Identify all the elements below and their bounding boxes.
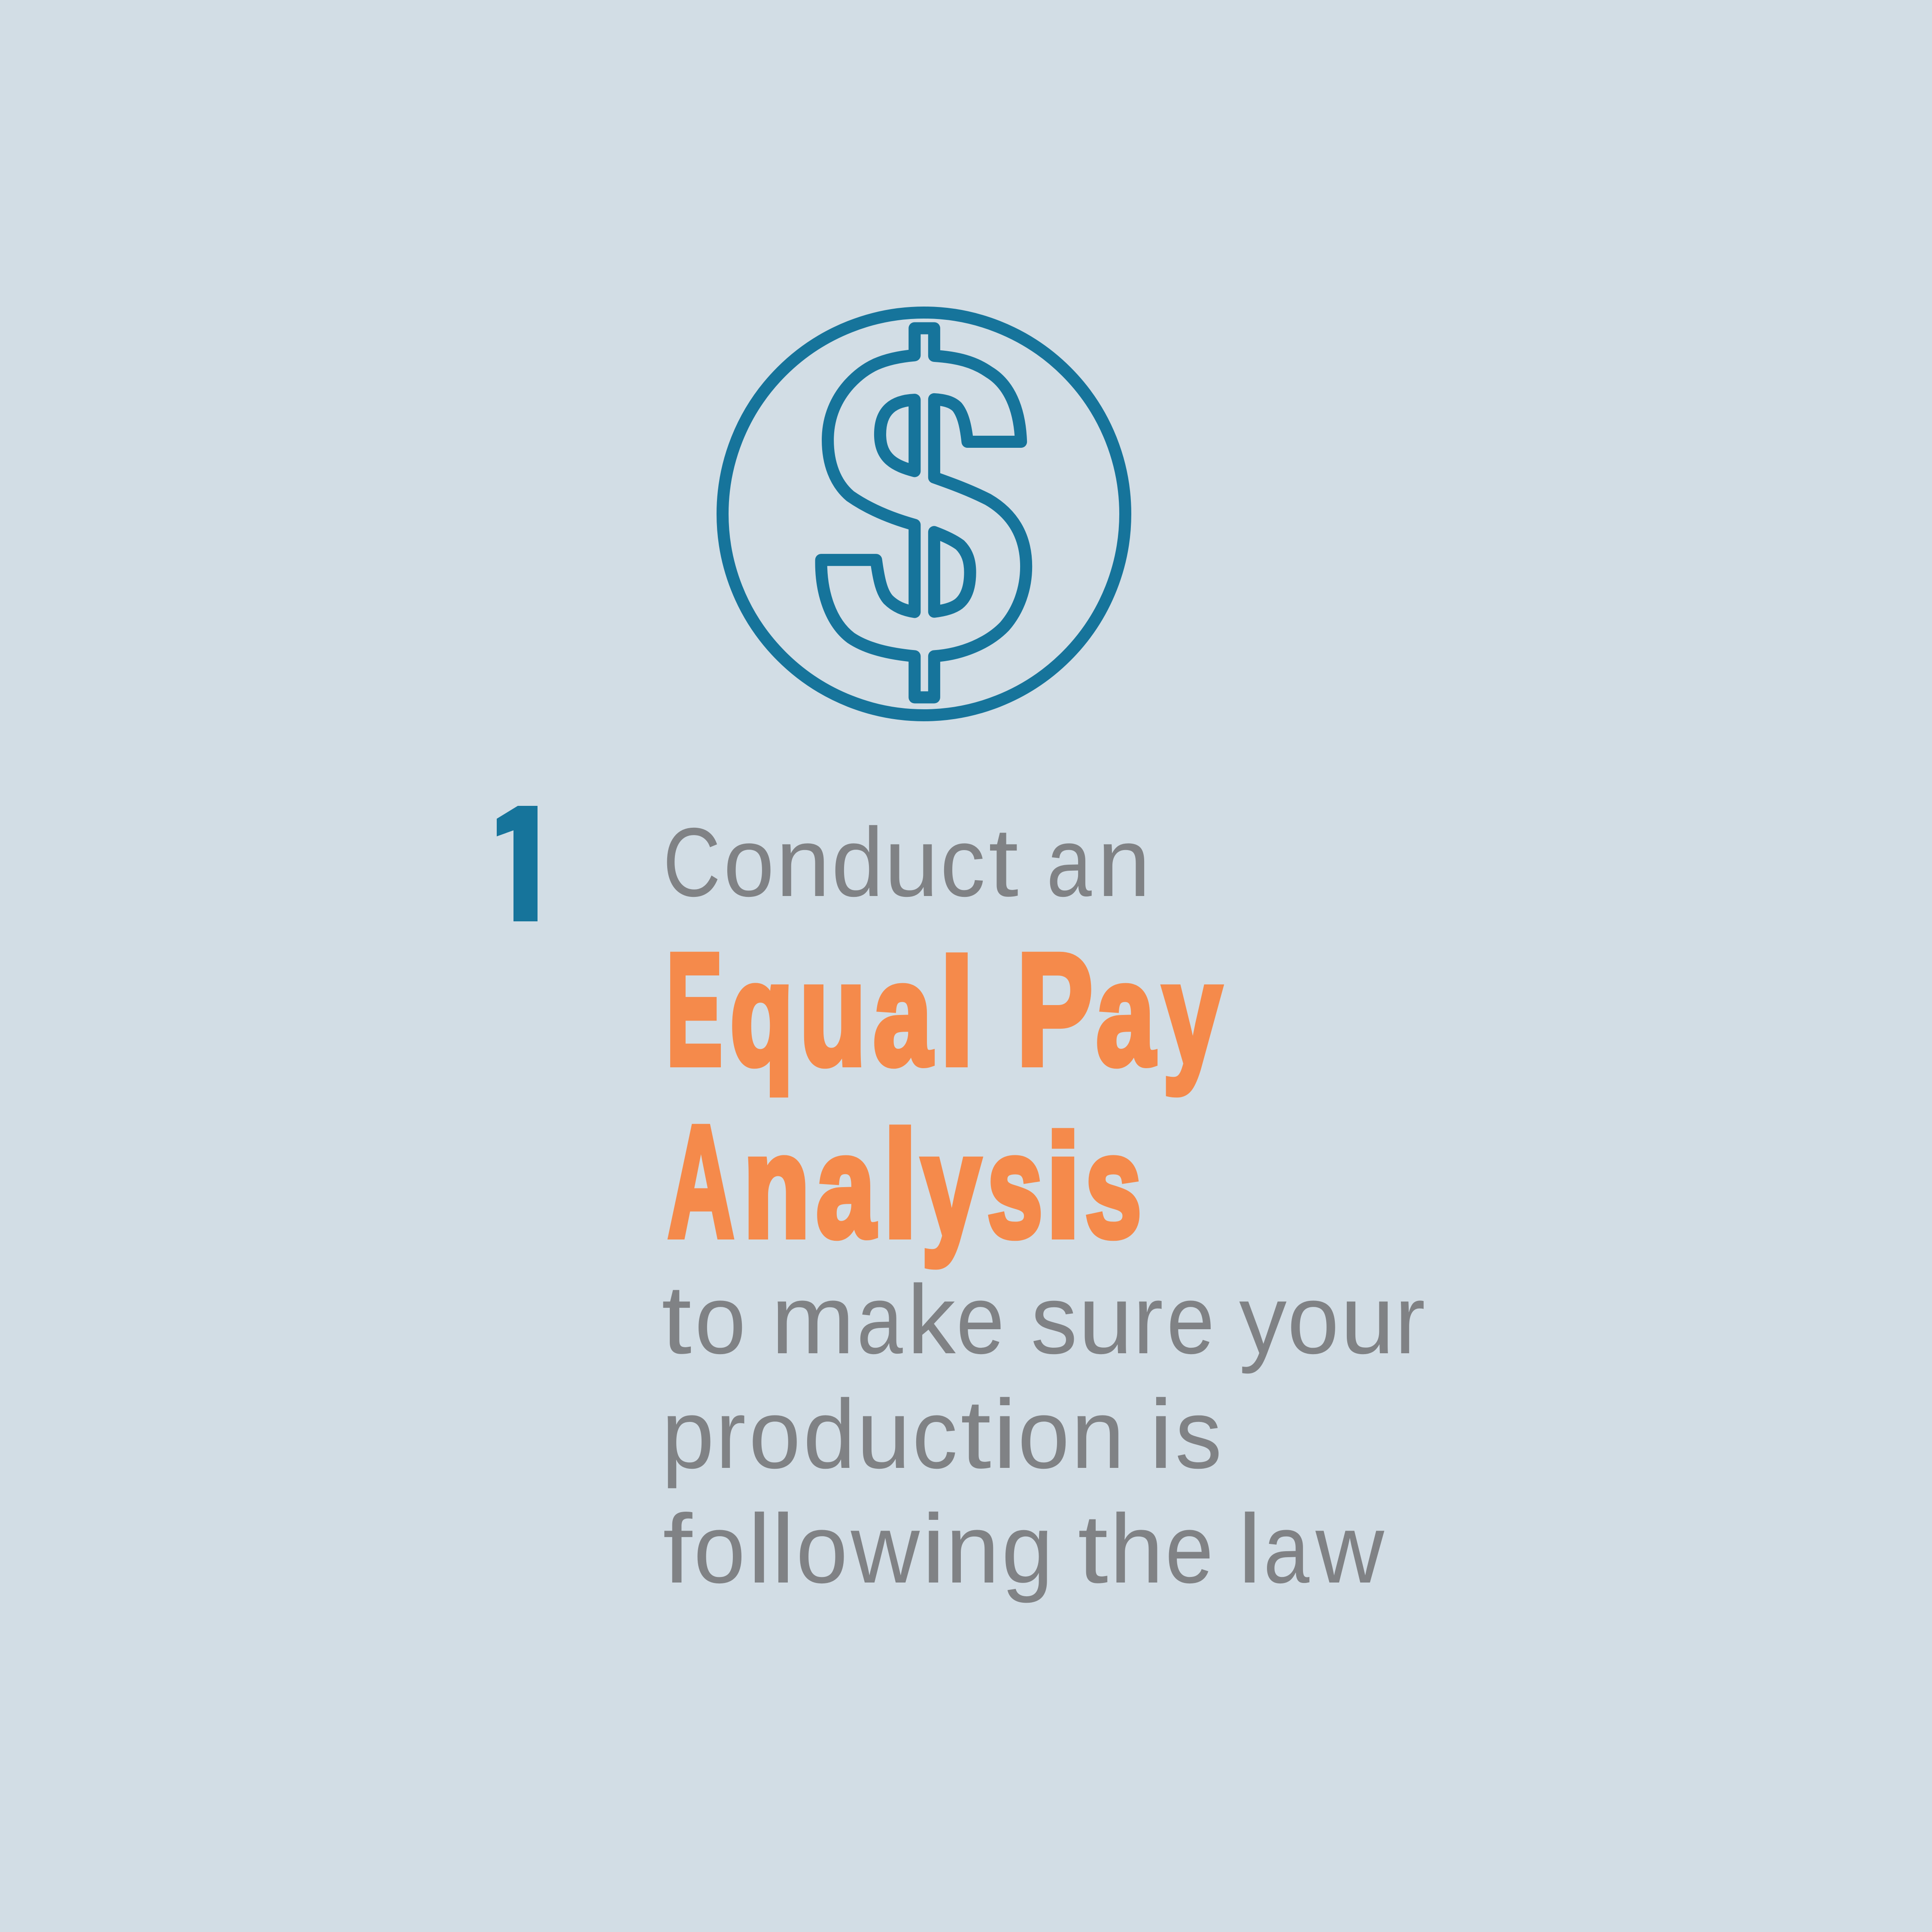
text: body line 2: p — [662, 1380, 714, 1489]
text: intro line: n — [776, 808, 830, 917]
text: body line 1: k — [907, 1265, 956, 1374]
text: body line 1: y — [1239, 1265, 1287, 1374]
text: body line 3: e — [1165, 1495, 1213, 1604]
heading line 1: a — [873, 933, 933, 1095]
text: body line 2: d — [803, 1380, 856, 1489]
text: intro line: u — [884, 808, 939, 917]
heading line 1: l — [940, 929, 974, 1097]
text: body line 1: r — [1395, 1265, 1425, 1374]
text: body line 2: s — [1175, 1380, 1222, 1489]
heading line 1: y — [1163, 933, 1222, 1096]
icon: dollar sign — [821, 328, 1026, 697]
text: body line 1: e — [956, 1265, 1005, 1374]
text: intro line: c — [940, 808, 985, 917]
icon: dollar sign in circle — [723, 313, 1125, 715]
text: body line 3: w — [851, 1495, 920, 1604]
text: body line 2: t — [960, 1380, 991, 1489]
text: body line 3: f — [663, 1495, 693, 1604]
heading line 2: y — [921, 1105, 981, 1268]
heading line 2: i — [1046, 1105, 1081, 1267]
text: body line 3: t — [1078, 1495, 1108, 1604]
infographic panel — [497, 307, 1424, 1603]
text: intro line: a — [1047, 808, 1092, 917]
step number: 1 — [479, 770, 572, 957]
text: body line 3: h — [1110, 1495, 1163, 1604]
heading line 1: P — [1017, 920, 1093, 1098]
text block: step description — [662, 808, 1425, 1604]
text: body line 2: u — [857, 1380, 911, 1489]
heading line 2: l — [883, 1101, 917, 1269]
heading line 1: u — [799, 933, 866, 1095]
text: body line 1: m — [771, 1265, 855, 1374]
text: body line 1: u — [1340, 1265, 1394, 1374]
heading line 2: n — [743, 1105, 810, 1267]
heading line 1: q — [730, 933, 793, 1096]
text: body line 2: r — [716, 1380, 746, 1489]
text: intro line: C — [663, 808, 720, 917]
text: body line 3: n — [946, 1495, 999, 1604]
text: body line 3: l — [771, 1495, 795, 1604]
text: body line 3: l — [1238, 1495, 1261, 1604]
text: intro line: n — [1097, 808, 1151, 917]
text: intro line: t — [988, 808, 1018, 917]
text: body line 1: t — [662, 1265, 692, 1374]
text: body line 3: o — [694, 1495, 745, 1604]
text: body line 2: o — [1018, 1380, 1069, 1489]
text: body line 1: e — [1166, 1265, 1215, 1374]
text: body line 3: o — [796, 1495, 848, 1604]
text: body line 1: o — [1287, 1265, 1339, 1374]
icon: circle outline — [723, 313, 1125, 715]
text: body line 3: a — [1264, 1495, 1309, 1604]
text: body line 2: o — [749, 1380, 801, 1489]
text: body line 1: u — [1078, 1265, 1133, 1374]
text: body line 2: c — [912, 1380, 957, 1489]
text: body line 1: a — [857, 1265, 903, 1374]
text: body line 1: r — [1133, 1265, 1163, 1374]
heading line 1: a — [1096, 933, 1155, 1095]
text: intro line: d — [831, 808, 884, 917]
text: body line 2: i — [1149, 1380, 1173, 1489]
text: body line 3: l — [748, 1495, 771, 1604]
text: body line 1: s — [1031, 1265, 1077, 1374]
heading line 2: a — [816, 1105, 876, 1267]
text: body line 2: n — [1071, 1380, 1124, 1489]
text: body line 1: o — [695, 1265, 746, 1374]
heading: Equal Pay Analysis — [666, 920, 1222, 1270]
heading line 1: E — [666, 920, 723, 1098]
text: body line 3: g — [1002, 1495, 1053, 1604]
heading line 2: s — [1085, 1105, 1142, 1267]
text: body line 3: i — [922, 1495, 945, 1604]
text: intro line: o — [723, 808, 775, 917]
heading line 2: A — [668, 1092, 734, 1270]
heading line 2: s — [987, 1105, 1043, 1267]
text: body line 3: w — [1315, 1495, 1385, 1604]
text: body line 2: i — [993, 1380, 1017, 1489]
